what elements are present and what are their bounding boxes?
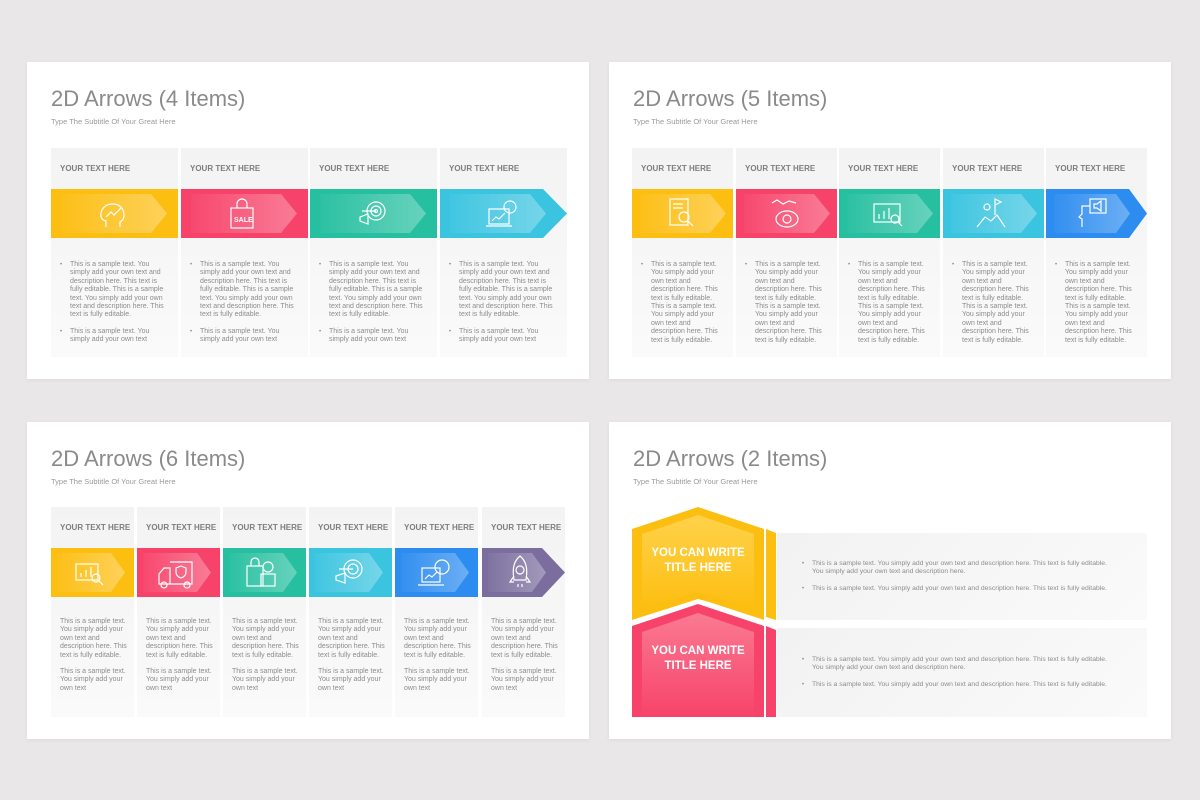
column 4: You simply add your	[318, 676, 381, 683]
column 2: description here. This	[146, 643, 213, 650]
column 2: This is a sample text. You	[200, 328, 279, 335]
subtitle: Type The Subtitle Of Your Great Here	[633, 477, 758, 486]
yellow title: TITLE HERE	[664, 562, 732, 574]
column 5: own text and	[1065, 320, 1105, 327]
red arrow	[632, 604, 776, 717]
column 1	[632, 148, 733, 357]
column 2: fully editable. This is a sample	[200, 286, 293, 293]
column 2: YOUR TEXT HERE	[745, 164, 815, 173]
column 3: You simply add your	[858, 311, 921, 318]
column 4: simply add your own text	[459, 336, 536, 343]
column 1: YOUR TEXT HERE	[60, 523, 130, 532]
text box 2	[777, 628, 1147, 717]
column 3: description here. This	[858, 328, 925, 335]
column 6: text is fully editable.	[491, 652, 552, 659]
column 4: text is fully editable.	[962, 337, 1023, 344]
column 2: description here. This text is	[200, 278, 287, 285]
column 1: simply add your own text and	[70, 269, 161, 276]
yellow arrow	[632, 507, 776, 620]
yellow title	[651, 547, 745, 574]
red title	[651, 645, 745, 672]
column 3	[839, 148, 940, 357]
column 4: own text and	[962, 278, 1002, 285]
column 3: own text and	[858, 278, 898, 285]
column 3: own text and	[232, 635, 272, 642]
column 1	[51, 148, 178, 357]
column 4: text is fully editable.	[962, 295, 1023, 302]
column 5: This is a sample text.	[404, 668, 470, 675]
column 1: description here. This	[60, 643, 127, 650]
column 5: own text and	[1065, 278, 1105, 285]
column 1: description here. This	[651, 286, 718, 293]
column 4: You simply add your	[962, 269, 1025, 276]
column 5: description here. This	[404, 643, 471, 650]
column 2: This is a sample text.	[146, 668, 212, 675]
column 1: This is a sample text.	[60, 618, 126, 625]
column 4: You simply add your	[318, 626, 381, 633]
column 1: This is a sample text. You	[70, 261, 149, 268]
column 3: description here. This	[858, 286, 925, 293]
subtitle: Type The Subtitle Of Your Great Here	[51, 117, 176, 126]
column 2: simply add your own text	[200, 336, 277, 343]
column 3: YOUR TEXT HERE	[319, 164, 389, 173]
column 1: YOUR TEXT HERE	[641, 164, 711, 173]
column 1: text is fully editable.	[70, 311, 131, 318]
column 2: SALE	[234, 217, 253, 224]
column 3: description here. This text is	[329, 278, 416, 285]
column 6	[482, 507, 565, 717]
text box 2: You simply add your own text and description here.	[812, 664, 966, 671]
column 3: This is a sample text. You	[329, 328, 408, 335]
text box 1: This is a sample text. You simply add your own text and description here. This text is fully editable.	[812, 560, 1107, 567]
column 5: description here. This	[1065, 328, 1132, 335]
subtitle: Type The Subtitle Of Your Great Here	[633, 117, 758, 126]
text box 1: You simply add your own text and description here.	[812, 568, 966, 575]
column 1: You simply add your	[60, 676, 123, 683]
column 2: text and description here. This	[200, 303, 294, 310]
column 4: description here. This text is	[459, 278, 546, 285]
column 3: text is fully editable.	[232, 652, 293, 659]
panel: 6 items	[27, 422, 589, 739]
column 2	[181, 148, 308, 357]
column 5	[395, 507, 478, 717]
column 4: text. You simply add your own	[459, 295, 552, 302]
column 1: simply add your own text	[70, 336, 147, 343]
column 1: You simply add your	[651, 311, 714, 318]
column 1: This is a sample text.	[651, 261, 717, 268]
column 6: You simply add your	[491, 626, 554, 633]
column 1: description here. This	[651, 328, 718, 335]
column 3: text is fully editable.	[858, 337, 919, 344]
text box 1: This is a sample text. You simply add your own text and description here. This text is fully editable.	[812, 585, 1107, 592]
subtitle: Type The Subtitle Of Your Great Here	[51, 477, 176, 486]
column 3: description here. This	[232, 643, 299, 650]
panel: 5 items	[609, 62, 1171, 379]
column 2: simply add your own text and	[200, 269, 291, 276]
title: 2D Arrows (5 Items)	[633, 86, 827, 111]
column 2: This is a sample text.	[755, 261, 821, 268]
column 3: text is fully editable.	[329, 311, 390, 318]
column 2: YOUR TEXT HERE	[146, 523, 216, 532]
column 2: You simply add your	[755, 269, 818, 276]
panel: 4 items	[27, 62, 589, 379]
column 3: text. You simply add your own	[329, 295, 422, 302]
column 4: This is a sample text.	[962, 261, 1028, 268]
column 4	[440, 148, 567, 357]
column 5: This is a sample text.	[1065, 261, 1131, 268]
column 1: text is fully editable.	[651, 295, 712, 302]
column 4: own text and	[962, 320, 1002, 327]
column 2: This is a sample text.	[146, 618, 212, 625]
column 5: text is fully editable.	[1065, 295, 1126, 302]
text box 2: This is a sample text. You simply add your own text and description here. This text is fully editable.	[812, 681, 1107, 688]
column 3: This is a sample text.	[232, 668, 298, 675]
column 5	[1046, 148, 1147, 357]
column 2: text. You simply add your own	[200, 295, 293, 302]
column 5: own text	[404, 685, 430, 692]
column 4: description here. This	[318, 643, 385, 650]
column 1: YOUR TEXT HERE	[60, 164, 130, 173]
column 2: text is fully editable.	[146, 652, 207, 659]
column 3: You simply add your	[232, 626, 295, 633]
column 3: This is a sample text.	[858, 303, 924, 310]
column 5: You simply add your	[1065, 311, 1128, 318]
column 5: YOUR TEXT HERE	[404, 523, 474, 532]
column 4: text is fully editable.	[459, 311, 520, 318]
title: 2D Arrows (2 Items)	[633, 446, 827, 471]
column 3: text and description here. This	[329, 303, 423, 310]
column 1: own text and	[651, 320, 691, 327]
column 1: This is a sample text.	[651, 303, 717, 310]
red title: YOU CAN WRITE	[651, 645, 745, 657]
column 5: You simply add your	[404, 626, 467, 633]
column 1: You simply add your	[651, 269, 714, 276]
column 1: own text and	[60, 635, 100, 642]
column 4: This is a sample text. You	[459, 261, 538, 268]
column 3: This is a sample text. You	[329, 261, 408, 268]
column 4: description here. This	[962, 328, 1029, 335]
column 6: own text	[491, 685, 517, 692]
column 1	[51, 507, 134, 717]
column 2: You simply add your	[755, 311, 818, 318]
column 5: description here. This	[1065, 286, 1132, 293]
column 3: You simply add your	[858, 269, 921, 276]
red title: TITLE HERE	[664, 660, 732, 672]
column 3: YOUR TEXT HERE	[232, 523, 302, 532]
column 5: YOUR TEXT HERE	[1055, 164, 1125, 173]
column 4: simply add your own text and	[459, 269, 550, 276]
column 2: You simply add your	[146, 626, 209, 633]
column 4: own text and	[318, 635, 358, 642]
column 3: YOUR TEXT HERE	[848, 164, 918, 173]
column 6: description here. This	[491, 643, 558, 650]
column 6: You simply add your	[491, 676, 554, 683]
column 2: text is fully editable.	[200, 311, 261, 318]
column 5: You simply add your	[1065, 269, 1128, 276]
column 2: description here. This	[755, 286, 822, 293]
column 2: YOUR TEXT HERE	[190, 164, 260, 173]
column 1: own text	[60, 685, 86, 692]
yellow title: YOU CAN WRITE	[651, 547, 745, 559]
column 6: This is a sample text.	[491, 668, 557, 675]
column 1: text and description here. This	[70, 303, 164, 310]
column 2: description here. This	[755, 328, 822, 335]
column 4: This is a sample text.	[962, 303, 1028, 310]
column 1: This is a sample text. You	[70, 328, 149, 335]
column 2: own text	[146, 685, 172, 692]
column 3: own text	[232, 685, 258, 692]
column 1: You simply add your	[60, 626, 123, 633]
column 2: own text and	[755, 320, 795, 327]
column 2: text is fully editable.	[755, 295, 816, 302]
column 2: own text and	[146, 635, 186, 642]
column 3: own text and	[858, 320, 898, 327]
panel: 2 items	[609, 422, 1171, 739]
column 3: You simply add your	[232, 676, 295, 683]
column 4: text and description here. This	[459, 303, 553, 310]
column 2	[137, 507, 220, 717]
column 3: fully editable. This is a sample	[329, 286, 422, 293]
column 2: text is fully editable.	[755, 337, 816, 344]
column 4: description here. This	[962, 286, 1029, 293]
column 2: You simply add your	[146, 676, 209, 683]
column 4: YOUR TEXT HERE	[449, 164, 519, 173]
column 5: own text and	[404, 635, 444, 642]
column 3: simply add your own text and	[329, 269, 420, 276]
column 4: YOUR TEXT HERE	[952, 164, 1022, 173]
column 1: description here. This text is	[70, 278, 157, 285]
column 4: You simply add your	[962, 311, 1025, 318]
column 2: own text and	[755, 278, 795, 285]
title: 2D Arrows (4 Items)	[51, 86, 245, 111]
column 4	[943, 148, 1044, 357]
column 3: This is a sample text.	[858, 261, 924, 268]
column 5: text is fully editable.	[1065, 337, 1126, 344]
column 1: text. You simply add your own	[70, 295, 163, 302]
text box 2: This is a sample text. You simply add your own text and description here. This text is fully editable.	[812, 656, 1107, 663]
column 5: This is a sample text.	[1065, 303, 1131, 310]
title: 2D Arrows (6 Items)	[51, 446, 245, 471]
column 5: text is fully editable.	[404, 652, 465, 659]
column 3: simply add your own text	[329, 336, 406, 343]
column 2: This is a sample text. You	[200, 261, 279, 268]
column 5: This is a sample text.	[404, 618, 470, 625]
column 1: text is fully editable.	[60, 652, 121, 659]
column 4: own text	[318, 685, 344, 692]
column 4: This is a sample text.	[318, 618, 384, 625]
column 3: text is fully editable.	[858, 295, 919, 302]
column 2: This is a sample text.	[755, 303, 821, 310]
column 6: This is a sample text.	[491, 618, 557, 625]
column 4	[309, 507, 392, 717]
column 4: This is a sample text. You	[459, 328, 538, 335]
column 2	[736, 148, 837, 357]
text box 1	[777, 533, 1147, 620]
column 1: This is a sample text.	[60, 668, 126, 675]
column 6: YOUR TEXT HERE	[491, 523, 561, 532]
column 1: own text and	[651, 278, 691, 285]
column 1: fully editable. This is a sample	[70, 286, 163, 293]
column 5: You simply add your	[404, 676, 467, 683]
column 3	[223, 507, 306, 717]
column 4: text is fully editable.	[318, 652, 379, 659]
column 3	[310, 148, 437, 357]
arrow shapes	[632, 507, 776, 717]
column 4: This is a sample text.	[318, 668, 384, 675]
column 1: text is fully editable.	[651, 337, 712, 344]
column 3: This is a sample text.	[232, 618, 298, 625]
column 4: fully editable. This is a sample	[459, 286, 552, 293]
column 4: YOUR TEXT HERE	[318, 523, 388, 532]
column 6: own text and	[491, 635, 531, 642]
